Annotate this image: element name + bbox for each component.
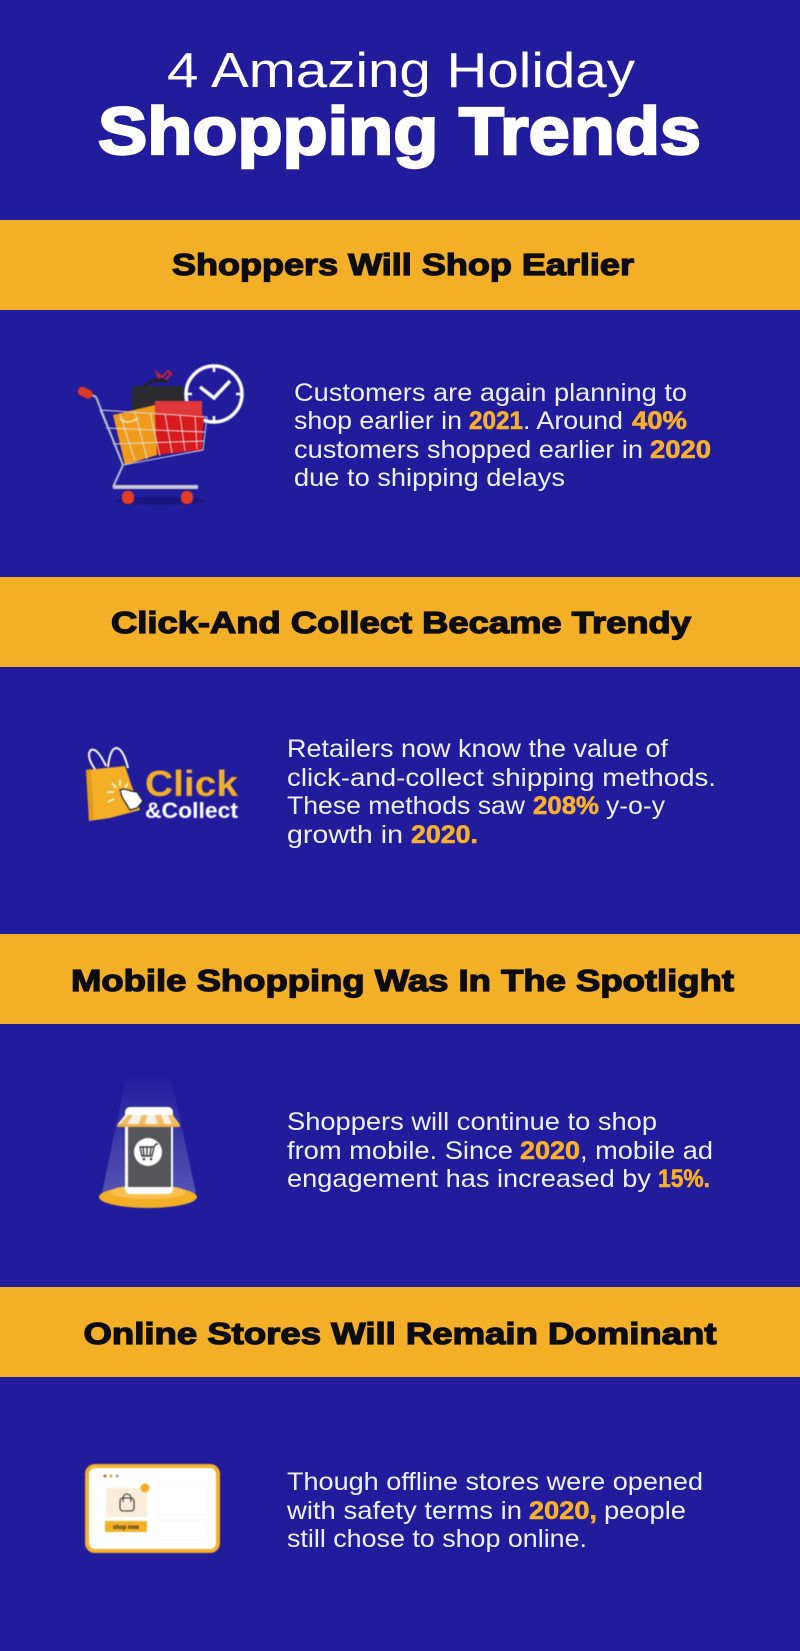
body text: with safety terms in (286, 1497, 522, 1525)
icon: click and collect bag (86, 748, 239, 823)
icon: online store window (87, 1466, 218, 1551)
body text (286, 1468, 703, 1553)
body text: Customers are again planning to (294, 379, 687, 407)
body text: 15%. (658, 1165, 710, 1193)
body text: y-o-y (606, 792, 666, 820)
panel: mobile shopping (0, 934, 800, 1208)
icon: shopping cart with clock (77, 366, 242, 505)
body text: click-and-collect shipping methods. (287, 764, 716, 792)
body text: These methods saw (287, 792, 526, 820)
body text (287, 735, 716, 849)
heading band (0, 220, 800, 310)
heading band: Online Stores Will Remain Dominant (84, 1316, 716, 1351)
body text (287, 1108, 713, 1193)
body text: , mobile ad (580, 1137, 713, 1165)
body text: from mobile. Since (287, 1137, 513, 1165)
body text: 2020 (520, 1137, 580, 1165)
body text (294, 379, 711, 492)
body text: 2021 (469, 407, 523, 435)
body text: 2020. (411, 821, 478, 849)
title: Shopping Trends (98, 94, 701, 169)
body text: 2020, (529, 1497, 597, 1525)
body text: growth in (287, 821, 403, 849)
body text: customers shopped earlier in (294, 436, 643, 464)
panel: shoppers will shop earlier (0, 220, 800, 505)
icon: click and collect bag: Click (145, 763, 239, 804)
heading band (0, 1287, 800, 1377)
body text: 208% (533, 792, 599, 820)
panel: click and collect (0, 577, 800, 849)
body text: shop earlier in (294, 407, 462, 435)
body text: . Around (523, 407, 623, 435)
body text: 40% (632, 407, 687, 435)
body text: due to shipping delays (294, 464, 565, 492)
body text: Shoppers will continue to shop (287, 1108, 657, 1136)
heading band (0, 577, 800, 667)
icon: online store window: shop now (113, 1525, 139, 1531)
body text: people (604, 1497, 686, 1525)
body text: engagement has increased by (287, 1165, 652, 1193)
panel: online stores (0, 1287, 800, 1553)
heading band: Mobile Shopping Was In The Spotlight (71, 963, 734, 998)
heading band: Shoppers Will Shop Earlier (172, 247, 634, 282)
heading band: Click-And Collect Became Trendy (111, 605, 692, 640)
title (98, 44, 701, 169)
body text: 2020 (650, 436, 711, 464)
body text: Though offline stores were opened (287, 1468, 703, 1496)
icon: click and collect bag: &Collect (145, 798, 239, 823)
body text: Retailers now know the value of (287, 735, 668, 763)
icon: phone storefront on spotlight platform (99, 1073, 197, 1208)
heading band (0, 934, 800, 1024)
title: 4 Amazing Holiday (167, 44, 636, 98)
body text: still chose to shop online. (287, 1525, 587, 1553)
